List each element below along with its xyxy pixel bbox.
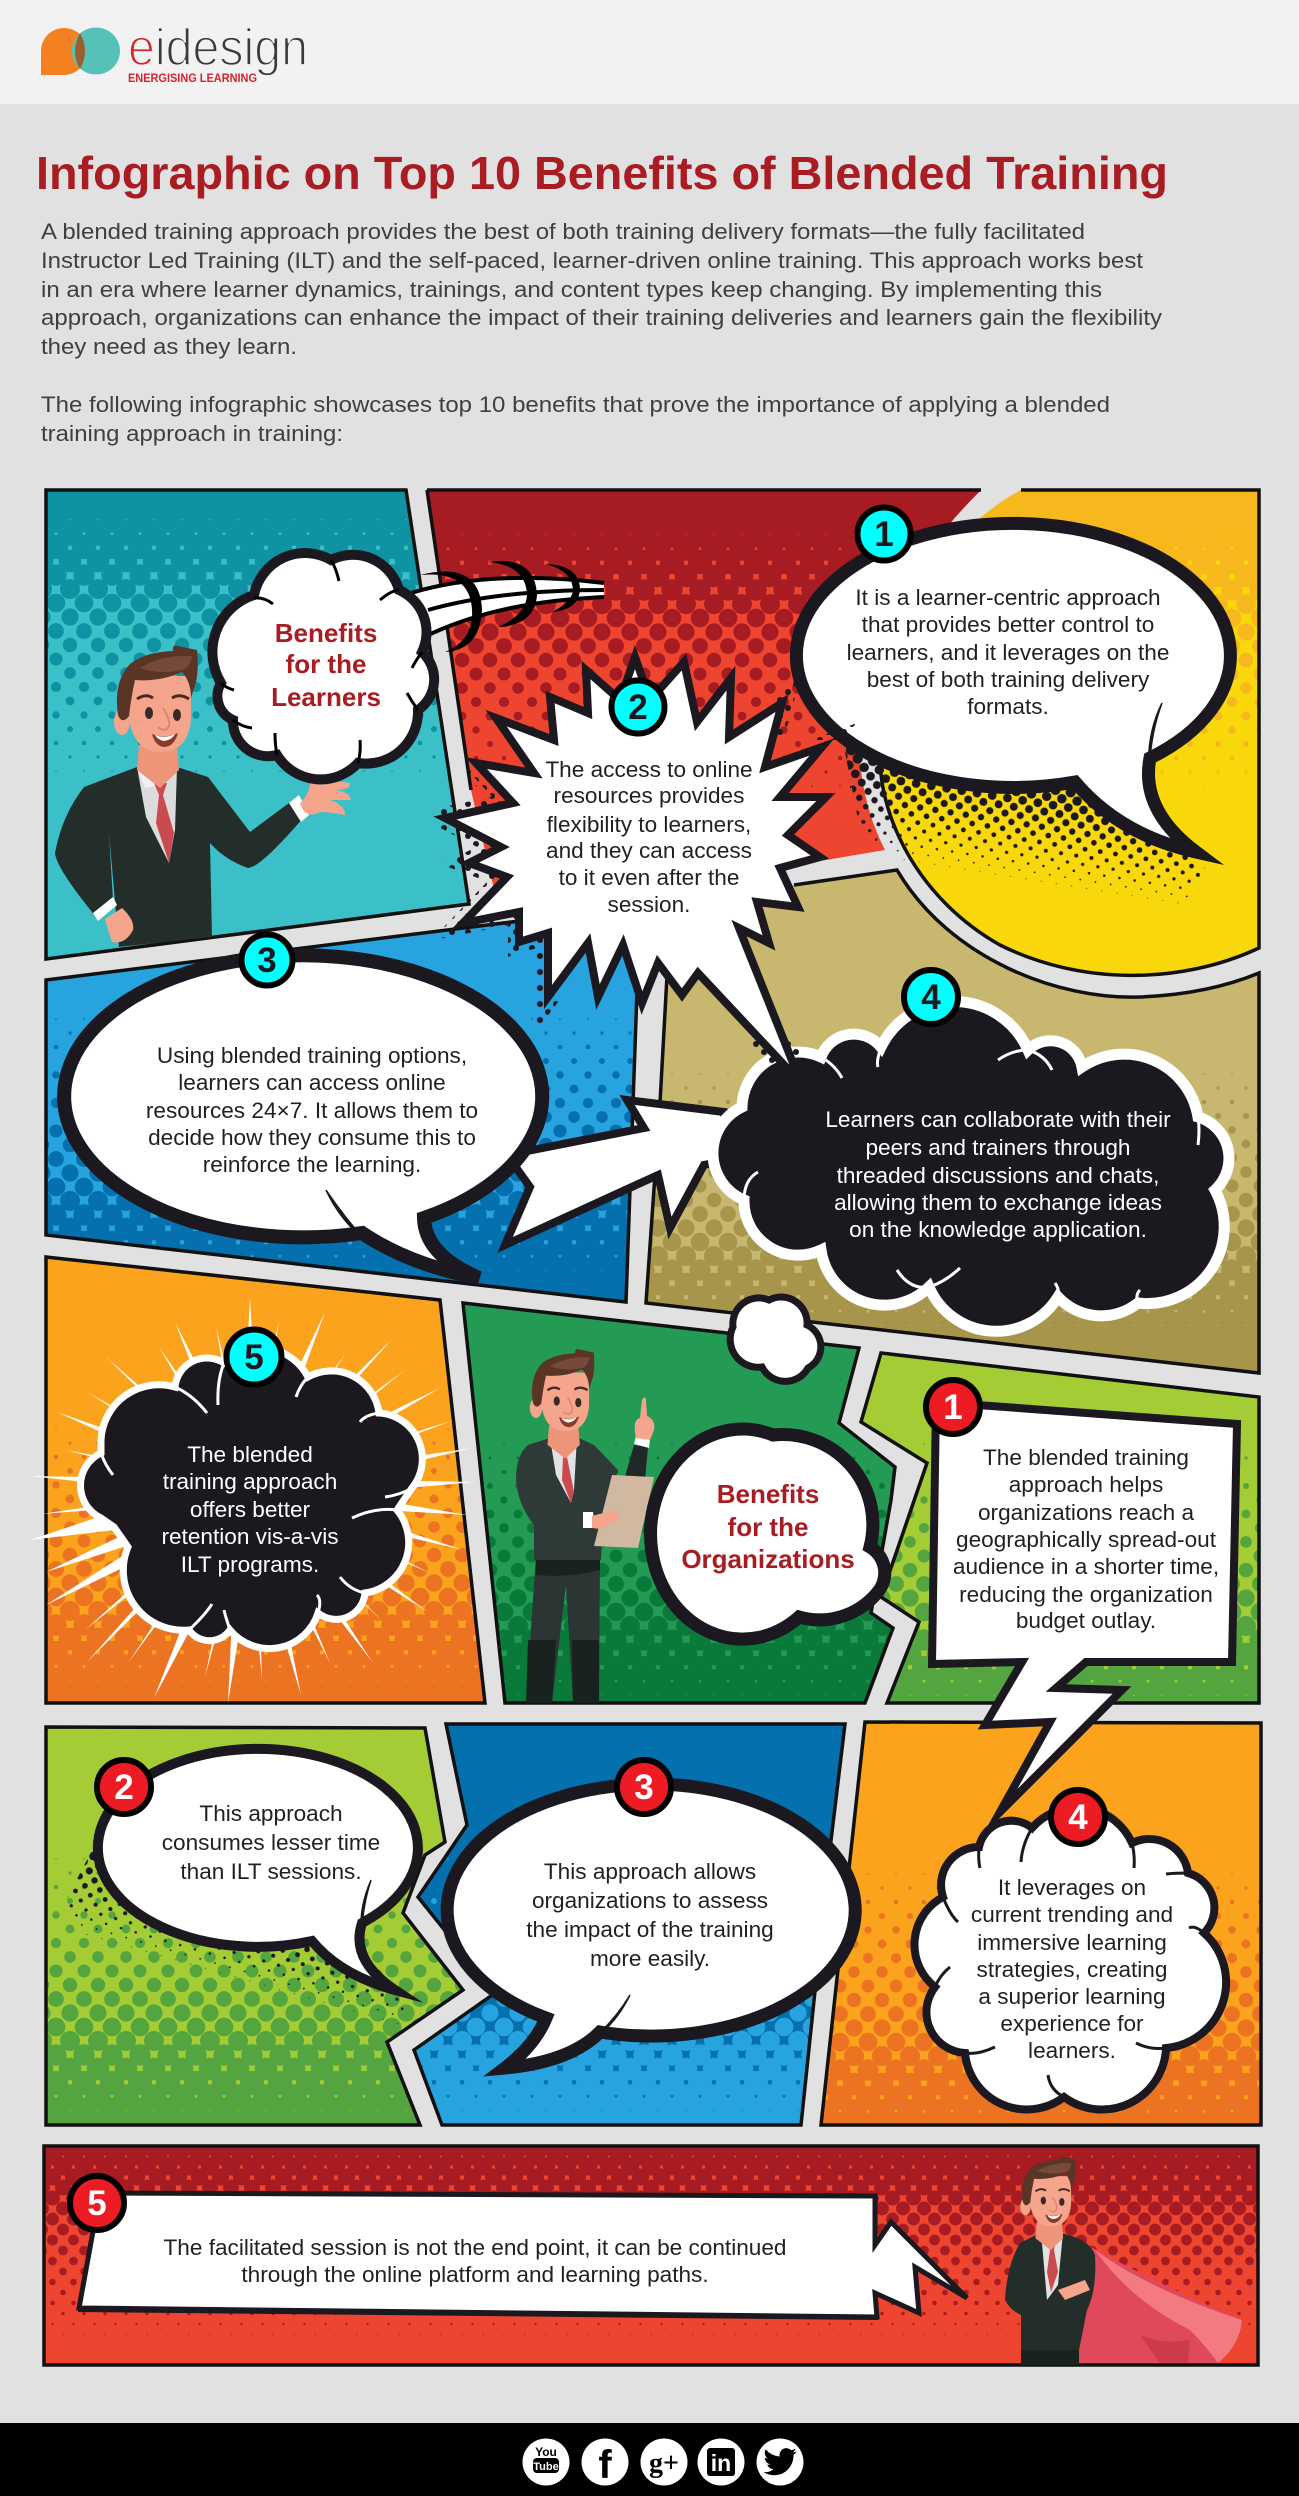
benefit text: approach helps: [1009, 1472, 1163, 1497]
panel: red banner: [42, 2144, 1260, 2367]
benefit text: learners.: [1028, 2038, 1116, 2063]
benefit text: peers and trainers through: [865, 1135, 1131, 1160]
benefit text: It is a learner-centric approach: [855, 585, 1161, 610]
heading: Organizations: [681, 1544, 855, 1574]
benefit text: current trending and: [971, 1902, 1173, 1927]
benefit text: geographically spread-out: [956, 1527, 1217, 1552]
benefit text: retention vis-a-vis: [161, 1524, 339, 1549]
benefit text: audience in a shorter time,: [953, 1554, 1219, 1579]
speech bubble: learner benefit 3: [64, 934, 542, 1278]
badge 4: [1051, 1790, 1105, 1844]
badge 5: [226, 1330, 282, 1384]
benefit text: strategies, creating: [977, 1957, 1167, 1982]
benefit text: experience for: [1000, 2011, 1144, 2036]
badge 1: [858, 508, 910, 560]
benefit text: immersive learning: [977, 1930, 1167, 1955]
panel: yellow: [879, 488, 1261, 978]
bubble outline: [64, 955, 542, 1278]
benefit text: than ILT sessions.: [180, 1859, 362, 1884]
footer band: [0, 2423, 1299, 2496]
heading: Benefits: [275, 618, 377, 648]
speech bubble: organization benefit 2: [97, 1749, 418, 1990]
badge 3: 3: [257, 941, 277, 980]
intro paragraph: A blended training approach provides the best of both training delivery formats—the fully facilitated: [41, 219, 1085, 244]
badge 5: [70, 2176, 124, 2230]
icon: youtube: [522, 2438, 570, 2486]
halftone shadow: lower lime bubble: [66, 1852, 404, 2024]
cloud: benefits for the learners: [212, 553, 434, 779]
tail crease: [592, 1995, 630, 2040]
cloud creases: [935, 1828, 1204, 2097]
cloud: learner benefit 4: [713, 970, 1229, 1331]
lead-in paragraph: training approach in training:: [41, 421, 343, 446]
bottom edge: [78, 2307, 878, 2320]
benefit text: the impact of the training: [526, 1917, 774, 1942]
halftone shadow: bubble 1: [844, 746, 1205, 904]
panel: blue lower: [412, 1722, 847, 2127]
panel: teal learners: [44, 488, 471, 961]
badge 3: [617, 1760, 671, 1814]
cloud explosion: learner benefit 5: [30, 1297, 475, 1703]
burst shape: [445, 657, 826, 1083]
benefit text: more easily.: [590, 1946, 710, 1971]
badge 3: [242, 934, 292, 986]
benefit text: on the knowledge application.: [849, 1217, 1147, 1242]
benefit text: and they can access: [546, 838, 752, 863]
speech bubble: organization benefit 3: [447, 1760, 855, 2068]
badge 2: [612, 680, 664, 734]
benefit text: flexibility to learners,: [547, 812, 751, 837]
benefit text: The blended: [187, 1442, 313, 1467]
icon: linkedin: [698, 2438, 744, 2486]
benefit text: resources 24×7. It allows them to: [146, 1098, 478, 1123]
bubble outline: [447, 1784, 855, 2068]
page header band: [0, 0, 1299, 104]
panel: red: [425, 488, 981, 886]
icon: twitter: [756, 2438, 804, 2486]
benefit text: training approach: [163, 1469, 337, 1494]
benefit text: Learners can collaborate with their: [825, 1107, 1171, 1132]
benefit text: best of both training delivery: [867, 667, 1150, 692]
intro paragraph: approach, organizations can enhance the impact of their training deliveries and learners gain the flexibility: [41, 305, 1163, 330]
logo mark: [41, 28, 120, 75]
icon: facebook: f: [598, 2443, 612, 2487]
character: presenter pointing to cloud: [55, 646, 351, 947]
badge 4: 4: [921, 978, 941, 1017]
starburst: learner benefit 2: [445, 657, 826, 1083]
arrow: white spike from cloud 4: [505, 1100, 730, 1245]
character: presenter with clipboard: [516, 1349, 654, 1703]
badge 5: 5: [87, 2184, 107, 2223]
box outline: [79, 2193, 967, 2317]
benefit text: ILT programs.: [181, 1552, 319, 1577]
benefit text: The access to online: [545, 757, 753, 782]
panel: blue: [44, 920, 638, 1304]
logo tagline: ENERGISING LEARNING: [128, 73, 257, 85]
benefit text: This approach allows: [544, 1859, 756, 1884]
icon: youtube: Tube: [533, 2461, 559, 2473]
benefit text: learners, and it leverages on the: [847, 640, 1169, 665]
heading: Learners: [271, 682, 381, 712]
thought tail: comet streaks: [411, 561, 604, 652]
heading: Benefits: [717, 1479, 819, 1509]
cloud creases: [221, 560, 422, 763]
speech bubble: learner benefit 1: [796, 508, 1230, 852]
badge 2: 2: [628, 688, 648, 727]
benefit text: budget outlay.: [1016, 1608, 1156, 1633]
benefit text: organizations to assess: [532, 1888, 768, 1913]
icon: google plus: [640, 2438, 688, 2486]
cloud creases: [744, 1047, 1199, 1303]
cloud shape: [80, 1348, 422, 1649]
icon: linkedin: in: [711, 2450, 731, 2476]
icon: youtube: You: [535, 2445, 557, 2459]
benefit text: The facilitated session is not the end point, it can be continued: [164, 2235, 786, 2260]
logo: eidesign: [41, 19, 308, 85]
lead-in paragraph: The following infographic showcases top 10 benefits that prove the importance of applying a blended: [41, 392, 1110, 417]
cloud: small thought puff: [730, 1297, 821, 1381]
tail crease: [361, 1880, 371, 1935]
benefit text: Using blended training options,: [157, 1043, 467, 1068]
benefit text: The blended training: [983, 1445, 1189, 1470]
box outline: [932, 1402, 1237, 1812]
badge 3: 3: [634, 1768, 654, 1807]
panel: tan: [644, 868, 1261, 1375]
cape: [1079, 2247, 1242, 2363]
badge 4: 4: [1068, 1798, 1088, 1837]
panel: lime: [859, 1351, 1261, 1705]
badge 1: [926, 1380, 980, 1434]
benefit text: a superior learning: [978, 1984, 1166, 2009]
benefit text: decide how they consume this to: [148, 1125, 476, 1150]
character: caped hero: [1005, 2156, 1242, 2365]
benefit text: organizations reach a: [978, 1500, 1194, 1525]
cloud shape: [651, 1429, 885, 1639]
icon: google plus: g+: [649, 2448, 679, 2479]
cloud shape: [713, 1002, 1229, 1331]
badge 1: 1: [874, 515, 894, 554]
heading: for the: [728, 1512, 808, 1542]
benefit text: threaded discussions and chats,: [837, 1163, 1159, 1188]
benefit text: This approach: [199, 1801, 343, 1826]
logo wordmark: eidesign: [128, 19, 308, 77]
benefit text: reinforce the learning.: [203, 1152, 421, 1177]
benefit text: reducing the organization: [959, 1582, 1213, 1607]
bubble outline: [796, 523, 1230, 852]
benefit text: that provides better control to: [862, 612, 1154, 637]
benefit text: allowing them to exchange ideas: [834, 1190, 1162, 1215]
badge 5: 5: [244, 1338, 264, 1377]
cloud: benefits for the organizations: [651, 1429, 885, 1639]
benefit text: It leverages on: [998, 1875, 1146, 1900]
tail crease: [326, 1190, 365, 1240]
icon: facebook: [582, 2438, 628, 2487]
benefit text: formats.: [967, 694, 1049, 719]
panel: lime lower: [44, 1725, 466, 2127]
panel: orange retention: [44, 1255, 487, 1705]
benefit text: through the online platform and learning paths.: [241, 2262, 709, 2287]
cloud: organization benefit 4: [914, 1790, 1226, 2110]
benefit text: to it even after the: [559, 865, 739, 890]
heading: for the: [286, 649, 366, 679]
benefit text: offers better: [190, 1497, 311, 1522]
badge 2: [97, 1760, 151, 1814]
intro paragraph: in an era where learner dynamics, trainings, and content types keep changing. By implementing this: [41, 277, 1102, 302]
benefit text: resources provides: [554, 783, 744, 808]
cloud shape: [914, 1807, 1226, 2110]
cloud shape: [212, 553, 434, 779]
badge 1: 1: [943, 1388, 963, 1427]
intro paragraph: they need as they learn.: [41, 334, 297, 359]
speech box: organization benefit 1 with lightning tail: [926, 1380, 1237, 1812]
bubble outline: [98, 1749, 418, 1990]
intro paragraph: Instructor Led Training (ILT) and the self-paced, learner-driven online training. This approach works best: [41, 248, 1144, 273]
speech box: organization benefit 5: [70, 2176, 967, 2320]
badge 4: [904, 970, 958, 1024]
benefit text: session.: [608, 892, 690, 917]
panel: green organizations: [461, 1301, 897, 1705]
cloud creases: [101, 1363, 412, 1630]
benefit text: consumes lesser time: [162, 1830, 380, 1855]
benefit text: learners can access online: [178, 1070, 446, 1095]
halftone shadow: starburst: [445, 657, 826, 1083]
explosion rays: [30, 1297, 475, 1703]
social icons: [522, 2438, 804, 2487]
tail crease: [1149, 703, 1162, 775]
title: Infographic on Top 10 Benefits of Blended Training: [36, 147, 1168, 199]
panel: orange lower: [819, 1720, 1263, 2127]
badge 2: 2: [114, 1768, 134, 1807]
